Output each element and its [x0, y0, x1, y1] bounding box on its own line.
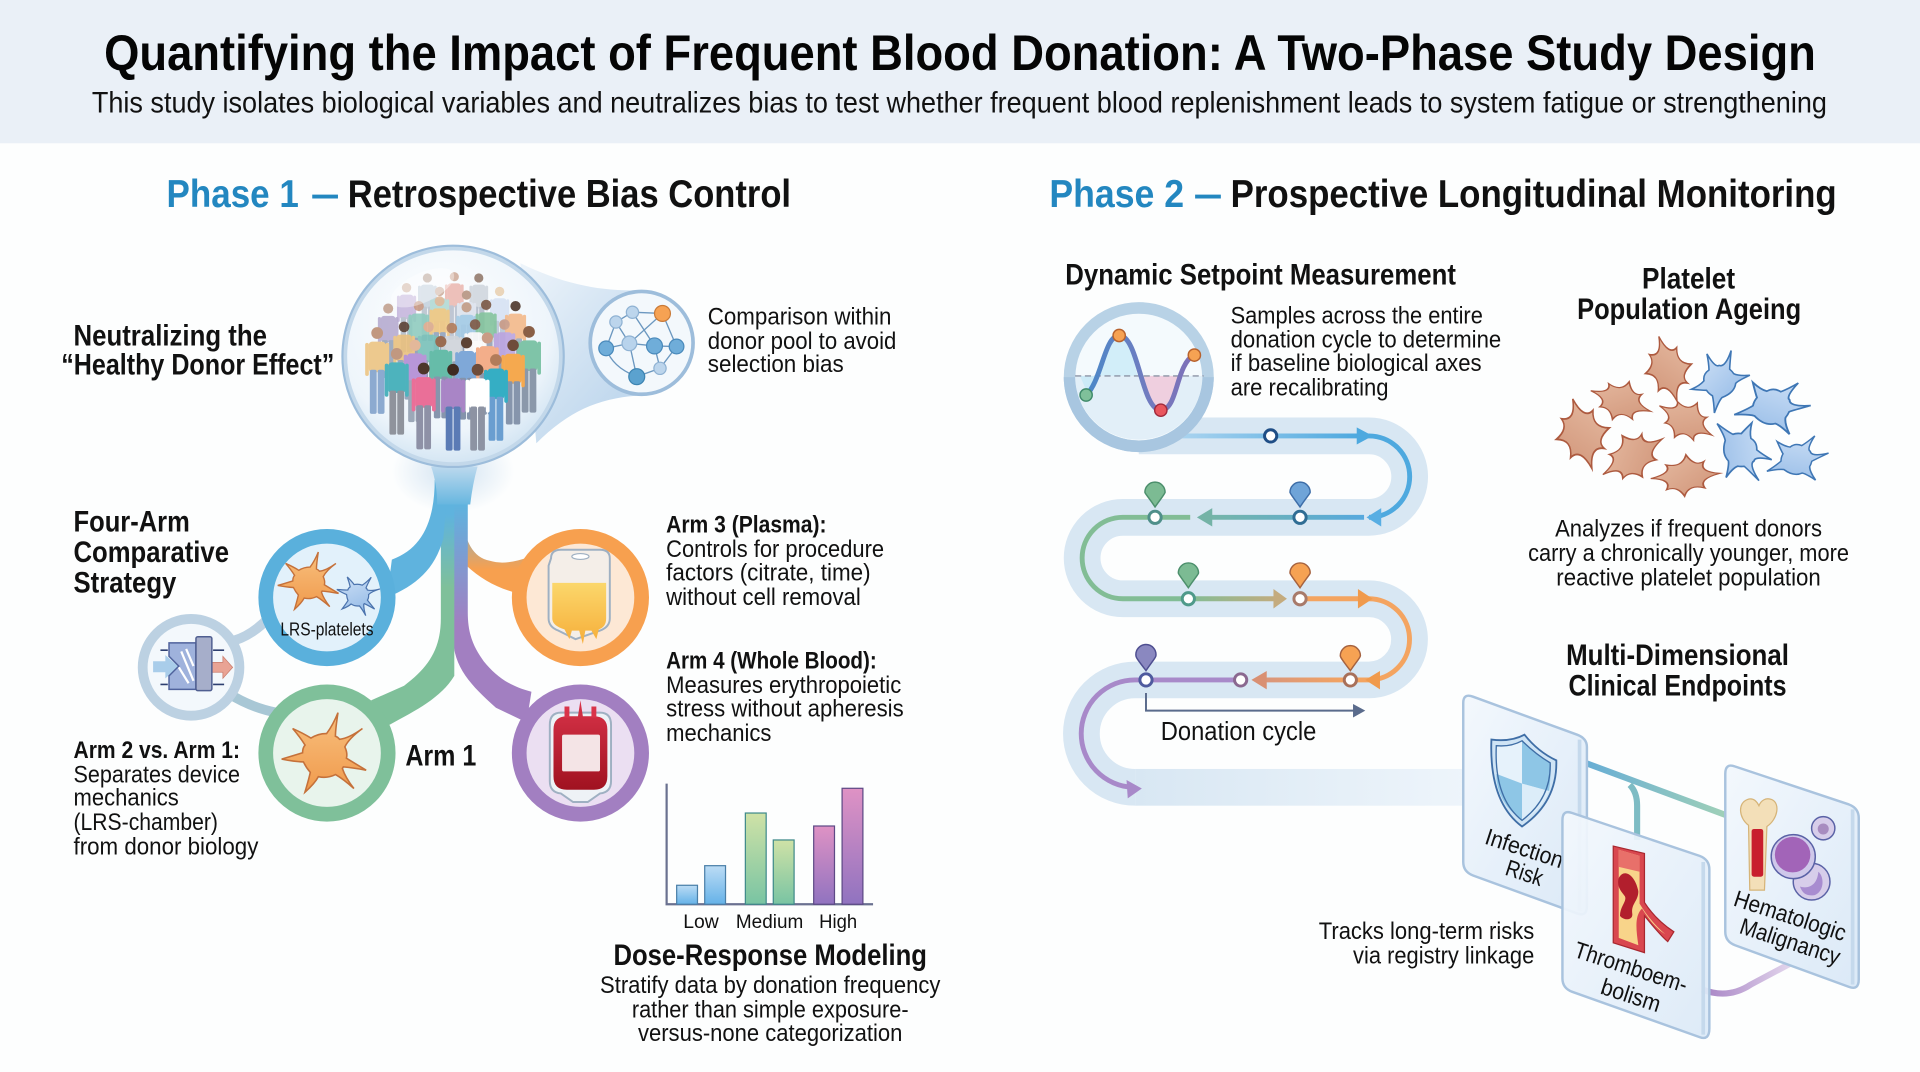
arm 4 text	[666, 648, 904, 747]
arm 1: circle	[266, 692, 388, 814]
registry linkage note	[1319, 918, 1534, 970]
setpoint description: Samples across the entire	[1231, 302, 1483, 329]
card connectors	[1582, 762, 1790, 994]
icon: activated platelet	[278, 552, 339, 609]
icon: bone marrow	[1741, 799, 1777, 890]
platelet description: reactive platelet population	[1556, 564, 1821, 591]
healthy donor heading: Neutralizing the	[74, 319, 267, 352]
clinical endpoints heading: Clinical Endpoints	[1569, 669, 1786, 702]
phase 2 heading: Prospective Longitudinal Monitoring	[1231, 173, 1837, 216]
young platelets	[1691, 351, 1837, 499]
arm 3 text: Arm 3 (Plasma):	[666, 512, 827, 539]
comparison note: donor pool to avoid	[708, 328, 896, 355]
arm 2 vs arm 1 text: from donor biology	[74, 834, 259, 861]
phase 2 heading: Phase 2	[1049, 173, 1184, 216]
pathway nodes	[1140, 430, 1356, 686]
chart labels: High	[819, 911, 857, 933]
dose-response text: Dose-Response Modeling	[613, 939, 927, 972]
donor network edges	[606, 312, 677, 377]
aged platelets	[1545, 329, 1722, 500]
arm 4 text: stress without apheresis	[666, 695, 904, 722]
comparison note	[708, 303, 896, 378]
platelet description: Analyzes if frequent donors	[1555, 515, 1822, 542]
phase 2 heading: —	[1195, 173, 1221, 216]
platelet ageing heading: Population Ageing	[1577, 293, 1801, 326]
thromboembolism label: Thromboem-	[1571, 937, 1691, 998]
four-arm heading: Comparative	[74, 536, 229, 569]
arm 4 text: Arm 4 (Whole Blood):	[666, 648, 877, 675]
bar chart: dose-response	[667, 784, 873, 933]
card: hematologic malignancy	[1725, 766, 1859, 988]
arm 3 text	[665, 512, 884, 611]
hematologic malignancy label: Hematologic	[1731, 885, 1850, 946]
four-arm heading: Four-Arm	[74, 505, 190, 538]
arm 3 text: Controls for procedure	[666, 536, 884, 563]
arm 2: LRS platelets circle	[266, 536, 388, 659]
arm 4 text: mechanics	[666, 720, 771, 747]
clinical endpoints heading: Multi-Dimensional	[1566, 639, 1789, 672]
donation cycle bracket arrow	[1146, 693, 1365, 718]
donation cycle label: Donation cycle	[1161, 718, 1316, 746]
zoom cone	[520, 263, 639, 443]
setpoint description	[1231, 302, 1501, 401]
infection risk label: Infection	[1482, 823, 1567, 873]
arm 3: plasma bag circle	[519, 536, 642, 659]
platelet ageing heading	[1577, 262, 1801, 326]
arm 1 label: Arm 1	[405, 739, 476, 772]
icon: platelet	[282, 713, 366, 792]
arm 4 text: Measures erythropoietic	[666, 672, 901, 699]
donor network nodes	[599, 305, 684, 385]
dose-response text: Stratify data by donation frequency	[600, 972, 941, 999]
dose-response text	[600, 939, 941, 1047]
platelet ageing heading: Platelet	[1642, 262, 1735, 295]
curve markers	[1080, 329, 1200, 416]
icon: whole blood bag	[550, 713, 611, 802]
arm 3 text: factors (citrate, time)	[666, 559, 871, 586]
crowd of donors	[365, 272, 541, 451]
comparison note: Comparison within	[708, 303, 891, 330]
phase 1 heading: Retrospective Bias Control	[348, 173, 791, 216]
hematologic malignancy label: Malignancy	[1737, 913, 1844, 970]
header band	[0, 0, 1920, 143]
setpoint description: if baseline biological axes	[1231, 350, 1482, 377]
pathway pins	[1136, 482, 1360, 671]
phase 1 heading: —	[312, 173, 339, 216]
card: thromboembolism	[1562, 812, 1709, 1038]
setpoint gauge circle	[1070, 308, 1208, 446]
crowd bubble	[343, 246, 563, 467]
network bubble	[590, 291, 693, 394]
dose-response text: versus-none categorization	[638, 1020, 902, 1047]
icon: plasma bag	[549, 550, 610, 639]
icon: malignant cells	[1771, 817, 1835, 900]
arm 2 vs arm 1 text: (LRS-chamber)	[74, 809, 218, 836]
chart labels	[683, 911, 857, 933]
arm 2 vs arm 1 text: Arm 2 vs. Arm 1:	[74, 737, 240, 764]
setpoint description: donation cycle to determine	[1231, 327, 1501, 354]
thromboembolism label: bolism	[1598, 973, 1664, 1017]
dose-response text: rather than simple exposure-	[632, 997, 909, 1024]
icon: blood vessel clot	[1613, 846, 1674, 953]
platelet description	[1528, 515, 1849, 591]
serpentine pathway band	[1081, 436, 1468, 806]
phase 1 heading: Phase 1	[167, 173, 299, 216]
comparison note: selection bias	[708, 351, 844, 378]
setpoint curve	[1086, 335, 1194, 410]
registry linkage note: via registry linkage	[1353, 943, 1534, 970]
clinical endpoints heading	[1566, 639, 1789, 702]
pathway coloured line and arrows	[1081, 427, 1410, 798]
branching arm connectors	[228, 430, 531, 725]
LRS-platelets label: LRS-platelets	[280, 618, 373, 639]
chart labels: Low	[683, 911, 720, 933]
arm 3 text: without cell removal	[665, 584, 861, 611]
four-arm heading	[74, 505, 229, 600]
arm 2 vs arm 1 text	[74, 737, 259, 861]
icon: shield	[1491, 735, 1556, 826]
icon: LRS chamber device	[143, 619, 239, 716]
chart labels: Medium	[736, 911, 803, 933]
platelet population illustration	[1545, 329, 1837, 500]
four-arm heading: Strategy	[74, 567, 177, 600]
infection risk label: Risk	[1502, 855, 1547, 891]
healthy donor heading	[61, 319, 334, 382]
platelet description: carry a chronically younger, more	[1528, 540, 1849, 567]
setpoint description: are recalibrating	[1231, 374, 1389, 401]
arm 4: whole blood bag circle	[519, 692, 642, 814]
phase 1 heading	[167, 173, 791, 216]
card: infection risk	[1463, 696, 1587, 914]
arm 2 vs arm 1 text: Separates device	[74, 761, 240, 788]
dynamic setpoint heading: Dynamic Setpoint Measurement	[1065, 259, 1456, 292]
healthy donor heading: “Healthy Donor Effect”	[61, 349, 334, 382]
arm 2 vs arm 1 text: mechanics	[74, 785, 179, 812]
icon: blue platelet	[331, 568, 384, 619]
registry linkage note: Tracks long-term risks	[1319, 918, 1534, 945]
